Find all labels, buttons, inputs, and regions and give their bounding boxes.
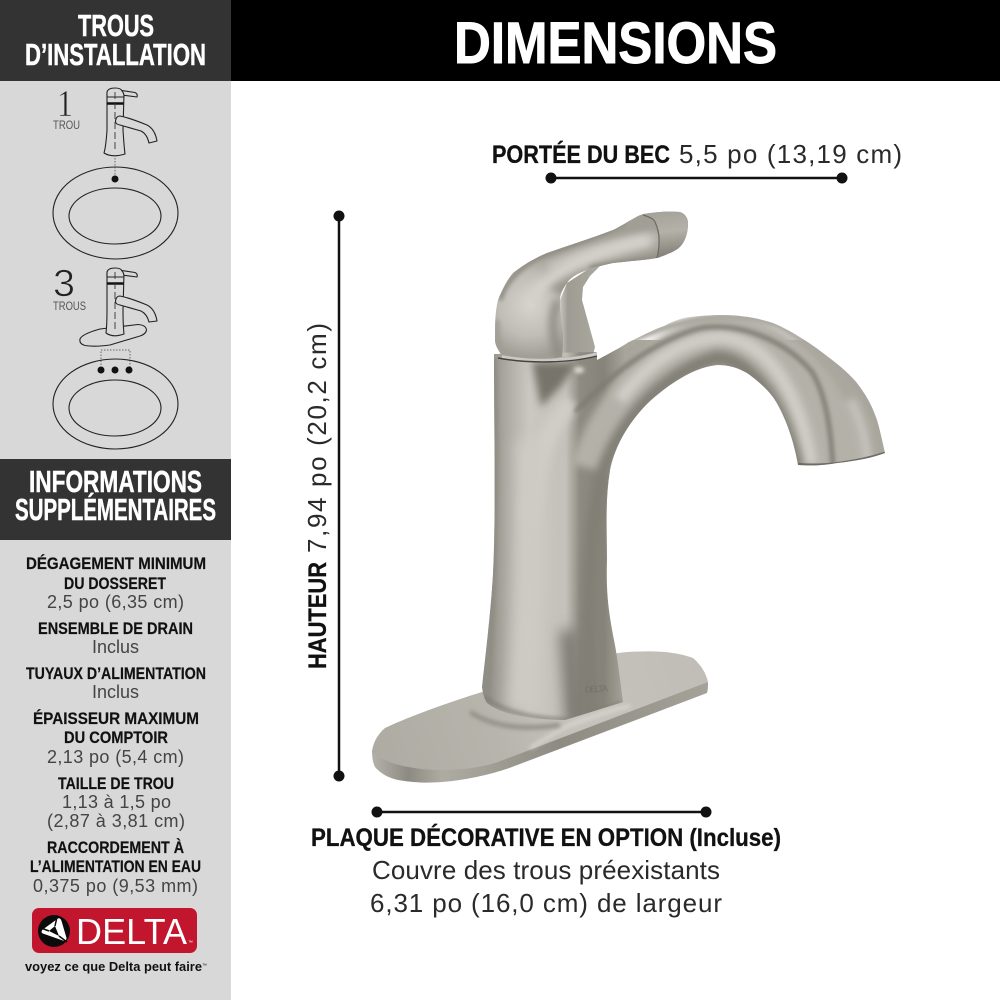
heading: additional information bbox=[0, 459, 231, 540]
tagline: voyez ce que Delta peut faire bbox=[25, 960, 202, 974]
text block: maximum counter thickness: DU COMPTOIR bbox=[64, 728, 168, 747]
illustration: faucet bbox=[372, 205, 900, 783]
tagline: ™ bbox=[202, 963, 207, 969]
base edge shade bbox=[484, 696, 622, 719]
body left light zone bbox=[520, 440, 530, 710]
text block: maximum counter thickness bbox=[33, 709, 199, 767]
text block: optional deck plate bbox=[311, 823, 781, 918]
dimension: spout reach label: PORTÉE DU BEC bbox=[492, 140, 670, 169]
faucet body and spout bbox=[482, 315, 885, 720]
text block: optional deck plate: PLAQUE DÉCORATIVE EN OPTION (Incluse) bbox=[311, 823, 781, 852]
icon: three-hole installation diagram: TROUS bbox=[53, 301, 86, 313]
title: dimensions: DIMENSIONS bbox=[454, 11, 777, 76]
panel: left sidebar background bbox=[0, 0, 231, 1000]
text block: supply lines: Inclus bbox=[92, 682, 139, 702]
dimension line: height bbox=[334, 210, 344, 782]
dark inner edge bbox=[589, 358, 795, 730]
text block: backsplash clearance bbox=[26, 554, 206, 612]
panel: dimensions title bar bbox=[231, 0, 1000, 81]
base crease bbox=[568, 630, 574, 725]
text block: hole size: TAILLE DE TROU bbox=[58, 774, 174, 793]
heading: additional information: INFORMATIONS bbox=[29, 464, 202, 499]
icon: three-hole installation diagram: 3 bbox=[53, 263, 75, 305]
deck plate bbox=[372, 651, 708, 783]
deck logo mark: DELTA bbox=[585, 683, 608, 695]
text block: maximum counter thickness: 2,13 po (5,4 cm) bbox=[47, 747, 184, 767]
dimension line: spout reach bbox=[546, 172, 848, 184]
text block: optional deck plate: 6,31 po (16,0 cm) de largeur bbox=[370, 888, 722, 918]
text block: supply lines bbox=[26, 664, 206, 702]
dark crease on upper arc bbox=[575, 327, 833, 468]
text block: water connection: L’ALIMENTATION EN EAU bbox=[30, 857, 201, 876]
logo: delta: ™ bbox=[188, 940, 193, 946]
heading: installation holes: D’INSTALLATION bbox=[25, 37, 206, 72]
heading: additional information: SUPPLÉMENTAIRES bbox=[15, 492, 216, 527]
text block: drain assembly bbox=[38, 619, 193, 657]
text block: drain assembly: Inclus bbox=[92, 637, 139, 657]
dimension line: deck plate width bbox=[372, 806, 712, 818]
lever handle stem bbox=[560, 266, 600, 357]
spout opening rim bbox=[798, 453, 885, 465]
outer edge tone bbox=[621, 315, 826, 355]
lever handle bbox=[495, 212, 688, 359]
text block: drain assembly: ENSEMBLE DE DRAIN bbox=[38, 619, 193, 638]
dark shoulder under collar bbox=[532, 362, 578, 407]
icon: one-hole installation diagram: TROU bbox=[53, 120, 80, 132]
text block: hole size: (2,87 à 3,81 cm) bbox=[47, 811, 185, 831]
light band across spout bbox=[620, 337, 812, 465]
icon: one-hole installation diagram: 1 bbox=[57, 83, 73, 125]
text block: maximum counter thickness: ÉPAISSEUR MAXIMUM bbox=[33, 709, 199, 728]
dimension: spout reach label: 5,5 po (13,19 cm) bbox=[679, 139, 902, 169]
left edge shade bbox=[485, 358, 495, 720]
text block: water connection: RACCORDEMENT À bbox=[47, 838, 184, 857]
icon: three-hole installation diagram bbox=[53, 263, 178, 449]
dimension: spout reach label bbox=[492, 139, 902, 169]
text block: hole size: 1,13 à 1,5 po bbox=[62, 792, 171, 812]
dimension: height label: HAUTEUR bbox=[304, 562, 332, 669]
text block: water connection bbox=[30, 838, 201, 896]
text block: backsplash clearance: DÉGAGEMENT MINIMUM bbox=[26, 554, 206, 573]
shoulder highlight bbox=[574, 367, 584, 373]
light sweep below shoulder bbox=[546, 398, 578, 443]
text block: backsplash clearance: DU DOSSERET bbox=[64, 574, 167, 593]
text block: supply lines: TUYAUX D’ALIMENTATION bbox=[26, 664, 206, 683]
text block: backsplash clearance: 2,5 po (6,35 cm) bbox=[47, 592, 184, 612]
dimension: height label: 7,94 po (20,2 cm) bbox=[302, 323, 332, 553]
text block: optional deck plate: Couvre des trous préexistants bbox=[372, 855, 720, 885]
logo: delta bbox=[32, 908, 197, 953]
heading: installation holes bbox=[0, 0, 231, 81]
text block: hole size bbox=[47, 774, 185, 831]
icon: one-hole installation diagram bbox=[53, 83, 178, 259]
tip highlight bbox=[850, 400, 868, 462]
logo: delta: DELTA bbox=[76, 911, 187, 952]
dimension: height label bbox=[302, 323, 332, 669]
spout base tone bbox=[596, 338, 842, 470]
heading: installation holes: TROUS bbox=[78, 8, 154, 43]
text block: water connection: 0,375 po (9,53 mm) bbox=[33, 876, 198, 896]
collar ring bbox=[498, 352, 597, 362]
